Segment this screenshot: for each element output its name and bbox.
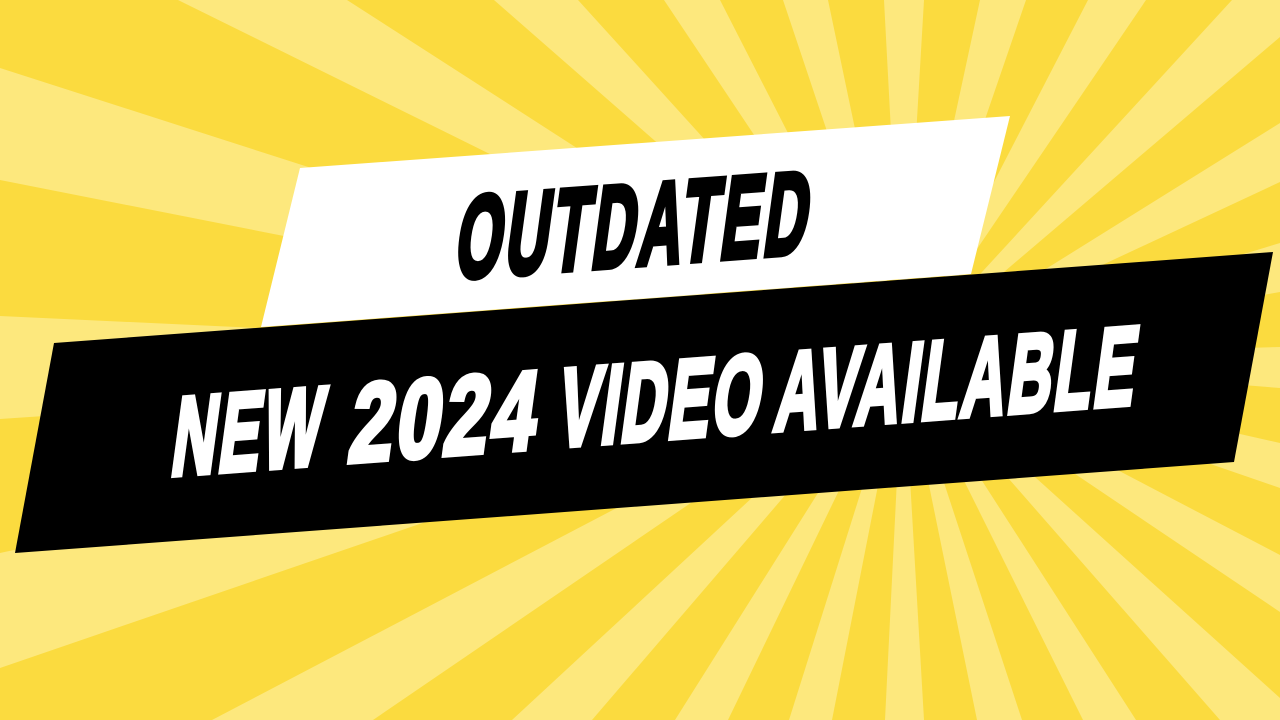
heading: NEW 2024 VIDEO AVAILABLE: VIDEO <box>552 330 774 471</box>
heading: OUTDATED: OUTDATED <box>450 147 822 303</box>
panel: black banner <box>15 252 1273 553</box>
heading: NEW 2024 VIDEO AVAILABLE: 2024 <box>343 347 550 486</box>
heading: NEW 2024 VIDEO AVAILABLE: NEW <box>166 363 334 499</box>
panel: white banner <box>261 116 1010 327</box>
heading: NEW 2024 VIDEO AVAILABLE <box>166 302 1148 499</box>
